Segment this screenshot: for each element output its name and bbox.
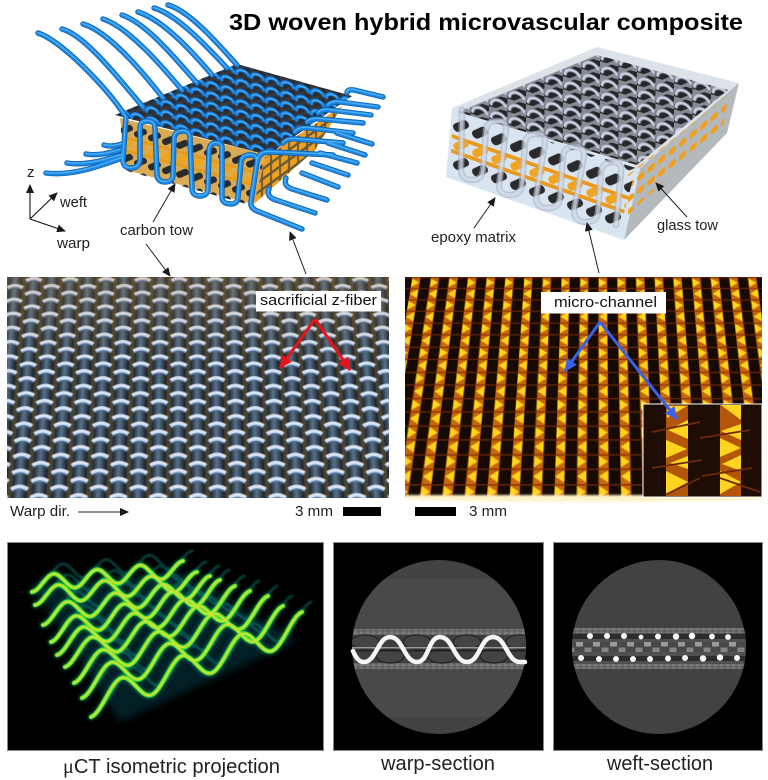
caption: weft-section: weft-section bbox=[606, 753, 713, 775]
axes: z, weft, warp bbox=[27, 164, 90, 252]
laminate band bbox=[352, 635, 526, 663]
arrows: blue to micro-channels bbox=[565, 322, 677, 419]
label: sacrificial z-fiber: sacrificial z-fiber bbox=[260, 292, 377, 309]
weave top pattern bbox=[115, 64, 352, 155]
scale bar: left photo: 3 mm bbox=[295, 503, 333, 520]
callout: epoxy matrix bbox=[431, 198, 516, 246]
lattice glow bbox=[32, 572, 298, 722]
tows on front face bbox=[450, 112, 636, 228]
weave visible through top bbox=[458, 55, 728, 165]
channel triangles bbox=[666, 405, 741, 494]
scale bar: right photo bbox=[415, 503, 507, 520]
photo: micro-channels lit orange bbox=[405, 277, 762, 497]
preform front face bbox=[120, 118, 265, 205]
circular scan bbox=[352, 560, 526, 734]
pale edge of the lit composite bbox=[405, 495, 762, 502]
channel dots bbox=[578, 633, 740, 662]
scale bar: right photo: 3 mm bbox=[469, 503, 507, 520]
crossing threads bbox=[652, 422, 760, 495]
callout: carbon tow: carbon tow bbox=[120, 222, 193, 239]
warp direction label: Warp dir. bbox=[10, 503, 70, 520]
panel: weft-section bbox=[554, 542, 762, 750]
right diagram: cured composite block bbox=[446, 47, 739, 240]
left diagram: 3D woven preform with sacrificial z-fibers bbox=[38, 4, 383, 229]
orange channel strips bbox=[666, 405, 688, 496]
callout: epoxy matrix: epoxy matrix bbox=[431, 229, 516, 246]
axes: z, weft, warp: z bbox=[27, 164, 34, 181]
caption: warp-section: warp-section bbox=[380, 753, 495, 775]
title: 3D woven hybrid microvascular composite bbox=[229, 9, 743, 35]
panel: warp-section bbox=[334, 542, 544, 750]
warp direction label bbox=[10, 503, 128, 520]
preform base bbox=[120, 106, 342, 204]
label: micro-channel: micro-channel bbox=[554, 294, 657, 311]
callout: carbon tow bbox=[120, 184, 193, 276]
z-fiber sinuous curves bbox=[32, 551, 311, 717]
scale bar: left photo bbox=[295, 503, 381, 520]
z-fiber sine cross-section bbox=[353, 637, 525, 662]
laminate band bbox=[572, 628, 746, 669]
epoxy right face bbox=[624, 83, 739, 240]
inset: magnified micro-channels bbox=[643, 404, 762, 497]
sacrificial z-fibers bbox=[38, 4, 383, 229]
panel: uCT isometric projection bbox=[8, 542, 324, 750]
callout: glass tow: glass tow bbox=[657, 217, 718, 234]
circular scan bbox=[572, 560, 746, 734]
preform top face bbox=[115, 64, 352, 155]
glass tow ends on side bbox=[628, 95, 728, 215]
photo: dry woven preform bbox=[7, 277, 389, 498]
arrow: to micro-channel bbox=[587, 223, 599, 273]
callout: glass tow bbox=[656, 183, 718, 234]
label: micro-channel bbox=[541, 292, 666, 314]
arrow: to sacrificial z-fiber bbox=[290, 232, 306, 274]
micro-channels bbox=[461, 110, 621, 225]
arrows: red to z-fibers bbox=[280, 319, 350, 370]
caption: uCT: μCT isometric projection bbox=[63, 756, 280, 778]
glass tow ends bbox=[254, 106, 342, 204]
axes: z, weft, warp: warp bbox=[56, 235, 90, 252]
epoxy top face bbox=[452, 47, 739, 168]
axes: z, weft, warp: weft bbox=[59, 195, 87, 211]
epoxy front face bbox=[446, 108, 640, 240]
